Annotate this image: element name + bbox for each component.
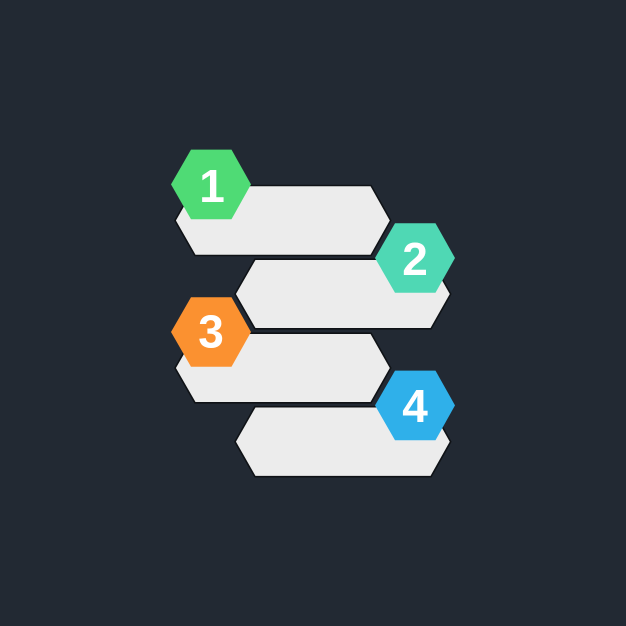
- panel: step 2 bar: [235, 259, 451, 329]
- panel: step 3 bar: [175, 333, 391, 403]
- badge: step 1: 1: [199, 160, 225, 212]
- badge: step 2: 2: [402, 233, 428, 285]
- badge: step 2: [375, 223, 455, 293]
- badge: step 3: [171, 297, 251, 367]
- badge: step 4: 4: [402, 380, 428, 432]
- badge: step 4: [375, 371, 455, 440]
- panel: step 1 bar: [175, 186, 391, 256]
- panel: step 4 bar: [235, 407, 451, 477]
- badge: step 1: [171, 150, 251, 219]
- badge: step 3: 3: [198, 306, 224, 358]
